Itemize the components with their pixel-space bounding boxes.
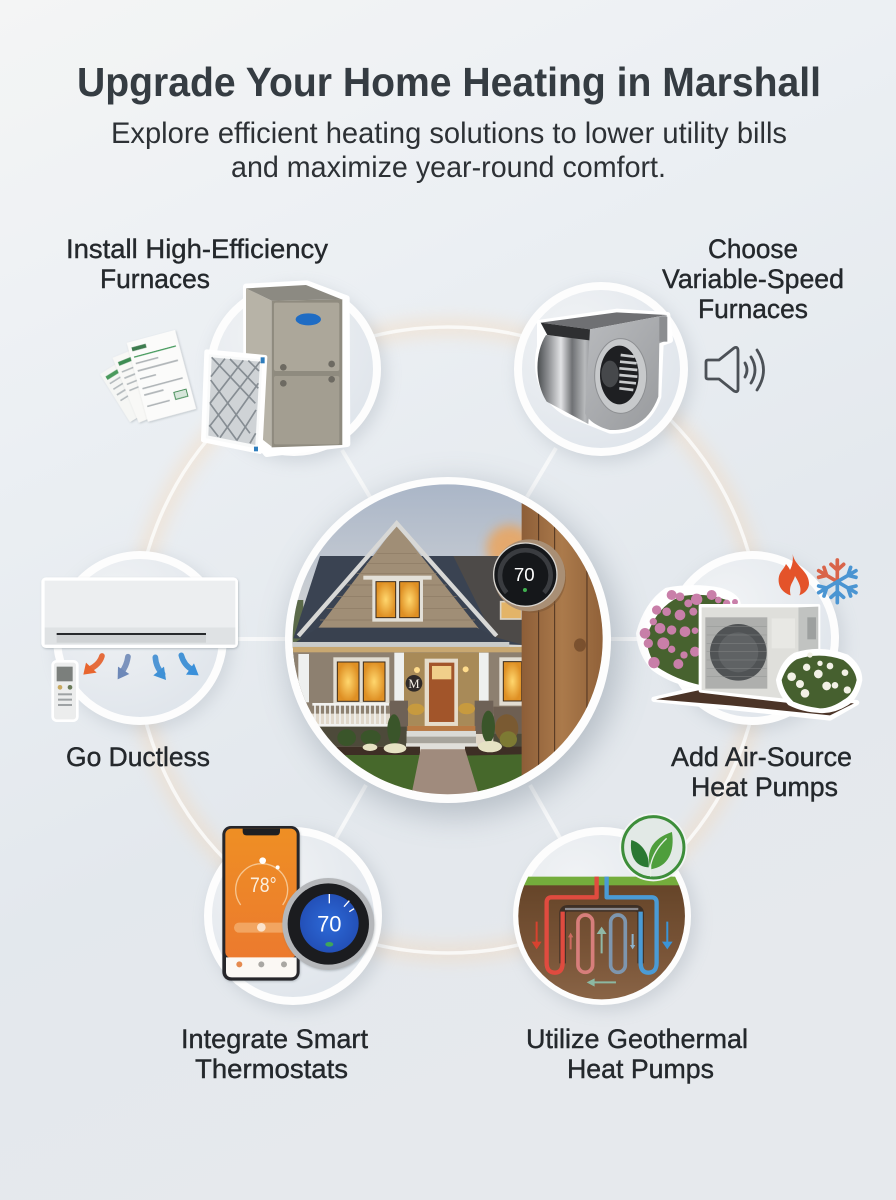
panel: install high-efficiency furnaces [66,234,386,462]
porch wall [293,647,523,714]
outdoor unit [701,606,818,701]
columns [298,654,309,702]
subtitle [111,117,787,184]
icon: furnace, filter and bills [100,283,347,454]
icon: green leaf badge [619,813,687,881]
subtitle: Explore efficient heating solutions to lower utility bills [111,117,787,150]
label: add air-source heat pumps: Heat Pumps [691,772,838,802]
icon: ground loop diagram [513,813,690,1002]
panel: integrate smart thermostats [181,826,388,1084]
airflow arrows [89,655,193,674]
upper window [372,577,423,622]
house initial sign: M [408,677,420,691]
lawn [345,755,420,790]
air filter [203,352,265,452]
smartphone [222,826,300,981]
panel: choose variable-speed furnaces [517,234,844,462]
icon: wall unit, remote and airflow [41,577,238,721]
label: choose variable-speed furnaces: Choose [708,234,798,264]
label: go ductless: Go Ductless [66,742,210,772]
icon: quiet sound [706,347,764,392]
railing [312,703,389,727]
roof [293,556,523,645]
furnace cabinet [246,283,347,454]
thermostat on wall: 70 [514,564,535,585]
nest thermostat [282,878,374,970]
thermostat on wall [493,539,566,613]
shrubs [337,711,518,747]
subtitle: and maximize year-round comfort. [231,151,666,184]
lower left window [333,657,389,703]
label: add air-source heat pumps [671,742,852,802]
connector ring and spokes [135,327,761,953]
illustration: craftsman house [287,480,613,798]
label: install high-efficiency furnaces [66,234,329,294]
wood wall [522,503,603,776]
porch roof [295,628,507,643]
house initial sign [406,675,422,692]
icon: phone and thermostat [222,826,374,981]
bills [100,330,196,423]
label: add air-source heat pumps: Add Air-Source [671,742,852,772]
label: install high-efficiency furnaces: Furnaces [100,264,210,294]
icon: snowflake [819,560,856,603]
right window [499,657,523,706]
door [425,659,458,726]
stone piers [390,701,408,734]
label: utilize geothermal heat pumps [526,1024,748,1084]
label: integrate smart thermostats [181,1024,368,1084]
title: Upgrade Your Home Heating in Marshall [77,59,821,105]
icon: phone and thermostat: 78° [250,873,277,897]
icon: flame [779,554,809,595]
mulch [323,747,420,757]
label: integrate smart thermostats: Thermostats [195,1054,348,1084]
panel: go ductless [41,555,238,772]
label: install high-efficiency furnaces: Install High-Efficiency [66,234,329,264]
gable [317,525,480,630]
panel: add air-source heat pumps [638,554,860,802]
panel: utilize geothermal heat pumps [513,813,748,1084]
white shrub [778,651,860,711]
flow arrows [537,922,667,982]
label: utilize geothermal heat pumps: Heat Pumps [567,1054,714,1084]
pink shrub [638,587,738,687]
steps [407,726,475,731]
label: choose variable-speed furnaces: Variable-Speed [662,264,844,294]
label: integrate smart thermostats: Integrate Smart [181,1024,368,1054]
icon: heat pump with shrubs [638,554,860,718]
icon: phone and thermostat: 70 [317,911,342,936]
icon: blower motor [537,312,670,431]
walkway [412,749,478,794]
label: utilize geothermal heat pumps: Utilize Geothermal [526,1024,748,1054]
label: choose variable-speed furnaces [662,234,844,324]
panel: central house with thermostat [285,477,621,816]
label: choose variable-speed furnaces: Furnaces [698,294,808,324]
